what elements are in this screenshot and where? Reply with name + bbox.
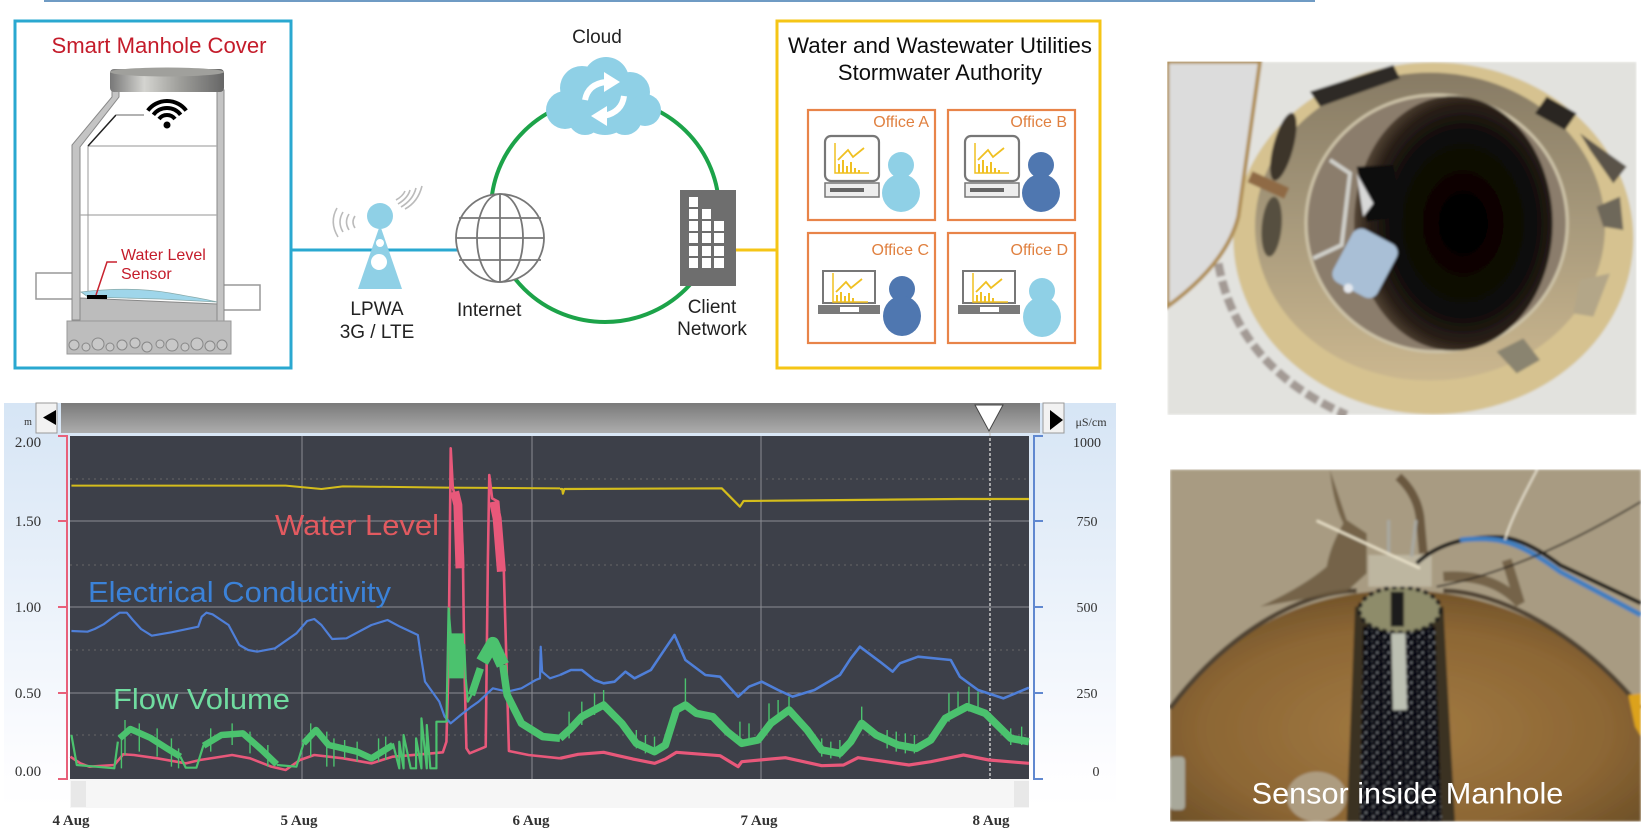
- photo: sensor in open manhole: [1167, 62, 1637, 415]
- left axis labels: 0.00: [15, 764, 41, 780]
- label: water level sensor: Water Level: [121, 247, 206, 264]
- blue conductivity series: [71, 613, 560, 723]
- icon: client building: [680, 190, 736, 286]
- label: flow volume: Flow Volume: [113, 684, 290, 716]
- connector: yellow line: [736, 248, 777, 252]
- series: right half: [560, 488, 1029, 767]
- label: client network: [677, 297, 747, 340]
- label: cloud: Cloud: [572, 27, 622, 48]
- label: water level sensor: Sensor: [121, 266, 172, 283]
- green flow series: [71, 608, 560, 768]
- yellow series: [560, 488, 1029, 507]
- office A: Office A: [873, 114, 929, 131]
- icon: LPWA tower: [333, 186, 422, 289]
- icon: wifi: [148, 101, 186, 128]
- left axis labels: 1.00: [15, 600, 41, 616]
- label: client network: Client: [688, 297, 737, 318]
- label: water level: Water Level: [275, 510, 439, 542]
- panel: utilities: [777, 21, 1100, 368]
- label: client network: Network: [677, 319, 747, 340]
- office B: Office B: [1010, 114, 1067, 131]
- date labels: 7 Aug: [740, 813, 778, 829]
- right axis labels: 250: [1076, 687, 1098, 702]
- sensor bar and leader: [87, 262, 117, 299]
- date labels: [52, 813, 1010, 829]
- right axis labels: 1000: [1073, 436, 1101, 451]
- date labels: 4 Aug: [52, 813, 90, 829]
- right axis labels: 750: [1076, 515, 1098, 530]
- right axis labels: [1073, 415, 1107, 780]
- yellow series: [71, 486, 560, 489]
- series: left half: [70, 448, 560, 770]
- plot area: [70, 436, 1029, 779]
- label: LPWA 3G / LTE: [340, 299, 414, 343]
- heading: smart manhole cover: Smart Manhole Cover: [52, 33, 266, 58]
- label: water level sensor: [121, 247, 206, 283]
- left axis labels: m: [24, 417, 32, 428]
- office C: Office C: [872, 242, 929, 259]
- foundation: [67, 321, 231, 354]
- right axis labels: μS/cm: [1075, 415, 1107, 429]
- water in channel: [81, 289, 217, 302]
- green flow series: [560, 678, 1029, 758]
- office A: [808, 110, 935, 220]
- lid: [110, 69, 224, 92]
- left axis labels: 1.50: [15, 514, 41, 530]
- label: internet: Internet: [457, 300, 522, 321]
- scroll strip: [70, 779, 1029, 808]
- heading: utilities: Water and Wastewater Utilities: [788, 33, 1092, 58]
- red water level series: [70, 448, 560, 770]
- date labels: 8 Aug: [972, 813, 1010, 829]
- grid lines: [70, 433, 1029, 779]
- office B: [948, 110, 1075, 220]
- left axis: [58, 436, 67, 779]
- heading: utilities: Stormwater Authority: [838, 60, 1042, 85]
- left axis labels: 2.00: [15, 435, 41, 451]
- photo: sensor inside manhole: [1170, 469, 1641, 822]
- network ring: [491, 98, 719, 322]
- left axis labels: [15, 417, 41, 780]
- red water level series: [560, 752, 1029, 767]
- heading: utilities: [788, 33, 1092, 85]
- label: electrical conductivity: Electrical Conductivity: [88, 577, 392, 609]
- panel: smart manhole cover: [15, 21, 291, 368]
- right axis labels: 500: [1076, 601, 1098, 616]
- manhole cross-section diagram: [36, 68, 260, 354]
- date labels: 6 Aug: [512, 813, 550, 829]
- date labels: 5 Aug: [280, 813, 318, 829]
- caption: sensor inside manhole: Sensor inside Manhole: [1252, 777, 1563, 810]
- office C: [808, 233, 935, 343]
- time slider bar: [36, 403, 1064, 433]
- blue conductivity series: [560, 635, 1029, 698]
- right axis labels: 0: [1092, 765, 1100, 780]
- label: LPWA 3G / LTE: LPWA: [350, 299, 404, 320]
- office D: Office D: [1010, 242, 1068, 259]
- label: LPWA 3G / LTE: 3G / LTE: [340, 322, 414, 343]
- left axis labels: 0.50: [15, 686, 41, 702]
- icon: globe: [456, 194, 544, 282]
- connector: cyan line: [291, 248, 458, 252]
- right axis: [1034, 436, 1043, 779]
- panel: time series chart: [4, 403, 1116, 829]
- icon: cloud: [546, 57, 661, 135]
- office D: [948, 233, 1075, 343]
